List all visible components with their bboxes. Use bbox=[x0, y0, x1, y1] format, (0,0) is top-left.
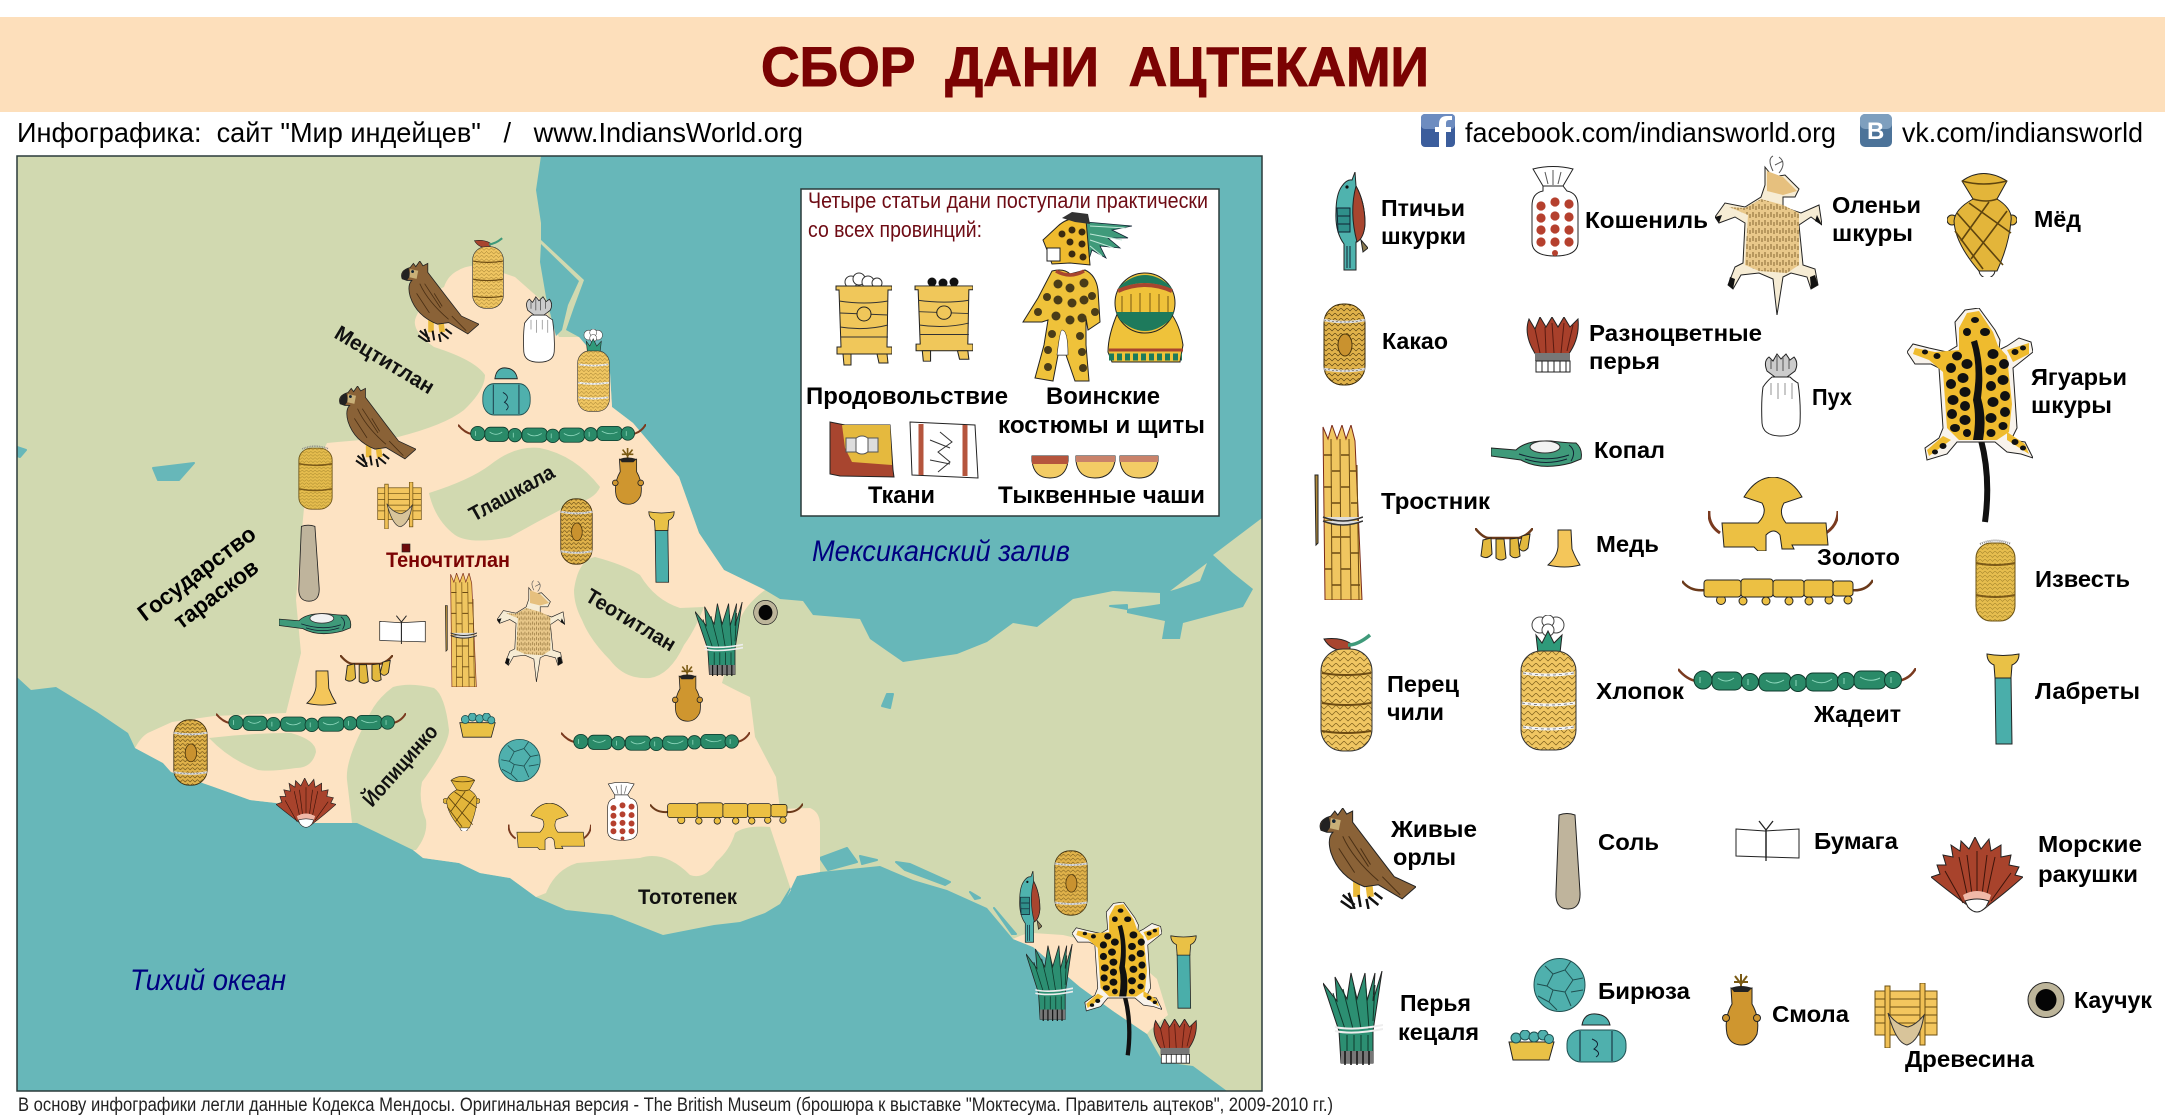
legend: live eagles: орлы bbox=[1393, 844, 1456, 870]
legend: bird skins: Птичьи bbox=[1381, 195, 1465, 221]
legend: gold bbox=[1682, 477, 1900, 605]
legend: sea shells bbox=[1931, 831, 2142, 912]
legend: jaguar skins bbox=[1907, 308, 2127, 522]
icon: textile white bbox=[910, 422, 978, 478]
legend: rubber: Каучук bbox=[2074, 987, 2152, 1013]
legend: jaguar skins: Ягуарьи bbox=[2031, 364, 2127, 390]
icon: jaguar helmet bbox=[1043, 212, 1132, 265]
legend: quetzal feathers: кецаля bbox=[1398, 1019, 1479, 1045]
legend: deer skins: Оленьи bbox=[1832, 192, 1921, 218]
icon: vk bbox=[1860, 114, 1892, 147]
legend: copper bbox=[1475, 528, 1659, 567]
legend: coloured feathers bbox=[1527, 317, 1762, 374]
legend: labrets: Лабреты bbox=[2035, 678, 2140, 704]
inset labels: костюмы и щиты bbox=[998, 412, 1205, 439]
legend: paper bbox=[1736, 821, 1898, 861]
icon: food boxes bbox=[836, 273, 973, 365]
label: Мецтитлан: Мецтитлан bbox=[330, 322, 438, 399]
label: Теотитлан: Теотитлан bbox=[581, 585, 680, 656]
icon: facebook bbox=[1421, 114, 1455, 147]
label: Тлашкала: Тлашкала bbox=[465, 461, 559, 526]
legend: cacao: Какао bbox=[1382, 328, 1448, 354]
legend: cochineal: Кошениль bbox=[1585, 207, 1708, 233]
legend: bird skins bbox=[1336, 172, 1466, 270]
source line: Инфографика: сайт "Мир индейцев" / www.IndiansWorld.org bbox=[17, 117, 803, 148]
legend: cacao bbox=[1324, 304, 1448, 385]
legend: rubber bbox=[2028, 982, 2152, 1018]
inset heading: со всех провинций: bbox=[808, 217, 982, 242]
legend: chili: чили bbox=[1387, 699, 1444, 725]
legend: deer skins: шкуры bbox=[1832, 220, 1913, 246]
legend: timber bbox=[1875, 983, 2034, 1072]
facebook link: facebook.com/indiansworld.org bbox=[1465, 117, 1836, 148]
inset heading bbox=[808, 188, 1208, 242]
legend: jaguar skins: шкуры bbox=[2031, 392, 2112, 418]
legend: copal: Копал bbox=[1594, 437, 1665, 463]
legend: cochineal bbox=[1532, 166, 1708, 256]
title banner bbox=[0, 17, 2165, 112]
legend: turquoise bbox=[1509, 958, 1690, 1062]
legend: honey: Мёд bbox=[2034, 206, 2081, 232]
social links bbox=[1421, 114, 2143, 148]
icon: vk: В bbox=[1867, 118, 1884, 145]
legend: quetzal feathers bbox=[1323, 971, 1479, 1065]
label: Мексиканский залив: Мексиканский залив bbox=[812, 535, 1070, 568]
legend: coloured feathers: перья bbox=[1589, 348, 1660, 374]
panel: legend of tribute goods bbox=[1315, 156, 2152, 1072]
legend: paper: Бумага bbox=[1814, 828, 1898, 854]
legend: bird skins: шкурки bbox=[1381, 223, 1466, 249]
inset labels: Воинские bbox=[1046, 383, 1160, 410]
legend: cotton: Хлопок bbox=[1596, 678, 1685, 704]
legend: salt bbox=[1556, 814, 1659, 909]
legend: live eagles: Живые bbox=[1390, 816, 1477, 842]
legend: gold: Золото bbox=[1817, 544, 1900, 570]
inset heading: Четыре статьи дани поступали практически bbox=[808, 188, 1208, 213]
inset labels: Ткани bbox=[868, 482, 935, 509]
inset labels bbox=[806, 383, 1205, 509]
legend: salt: Соль bbox=[1598, 829, 1659, 855]
vk link: vk.com/indiansworld bbox=[1902, 117, 2143, 148]
label: Тототепек: Тототепек bbox=[638, 886, 737, 909]
legend: jadeite bbox=[1678, 668, 1916, 727]
legend: sea shells: Морские bbox=[2038, 831, 2142, 857]
title banner: СБОР ДАНИ АЦТЕКАМИ bbox=[761, 35, 1429, 98]
legend: reed: Тростник bbox=[1381, 488, 1490, 514]
legend: resin: Смола bbox=[1772, 1001, 1849, 1027]
icon: shield bbox=[1108, 273, 1183, 362]
legend: reed bbox=[1315, 425, 1490, 600]
legend: copal bbox=[1491, 437, 1665, 466]
legend: chili: Перец bbox=[1387, 671, 1459, 697]
legend: timber: Древесина bbox=[1905, 1046, 2034, 1072]
map icons: tribute goods bbox=[174, 238, 1196, 1063]
legend: coloured feathers: Разноцветные bbox=[1589, 320, 1762, 346]
legend: copper: Медь bbox=[1596, 531, 1659, 557]
legend: quetzal feathers: Перья bbox=[1400, 990, 1471, 1016]
footer note: В основу инфографики легли данные Кодекса Мендосы. Оригинальная версия - The British Museum (брошюра к выставке "Моктесума. Правитель ацтеков", 2009-2010 гг.) bbox=[18, 1095, 1333, 1116]
legend: jadeite: Жадеит bbox=[1813, 701, 1901, 727]
label: Тихий океан: Тихий океан bbox=[130, 964, 286, 997]
legend: chili bbox=[1321, 635, 1459, 751]
legend: resin bbox=[1722, 974, 1849, 1045]
legend: deer skins bbox=[1715, 156, 1921, 315]
panel: map bbox=[17, 156, 1262, 1091]
legend: down: Пух bbox=[1812, 384, 1852, 410]
legend: turquoise: Бирюза bbox=[1598, 978, 1690, 1004]
label: Йопицинко: Йопицинко bbox=[358, 720, 443, 811]
legend: lime: Известь bbox=[2035, 566, 2130, 592]
inset labels: Тыквенные чаши bbox=[998, 482, 1205, 509]
legend: live eagles bbox=[1320, 808, 1477, 909]
icon: jaguar costume bbox=[1023, 270, 1100, 381]
icon: gourd bowls bbox=[1032, 456, 1158, 478]
legend: honey bbox=[1947, 174, 2081, 278]
label: Государство тарасков: Государство bbox=[132, 520, 261, 626]
inset labels: Продовольствие bbox=[806, 383, 1008, 410]
legend: cotton bbox=[1521, 615, 1685, 750]
label: Теночтитлан: Теночтитлан bbox=[386, 549, 510, 572]
legend: labrets bbox=[1987, 654, 2140, 744]
panel: four tribute categories bbox=[801, 188, 1219, 516]
legend: lime bbox=[1976, 540, 2130, 621]
legend: down bbox=[1762, 354, 1852, 436]
icon: textile yellow bbox=[830, 422, 894, 477]
label: Государство тарасков: тарасков bbox=[168, 554, 263, 634]
legend: sea shells: ракушки bbox=[2038, 861, 2138, 887]
